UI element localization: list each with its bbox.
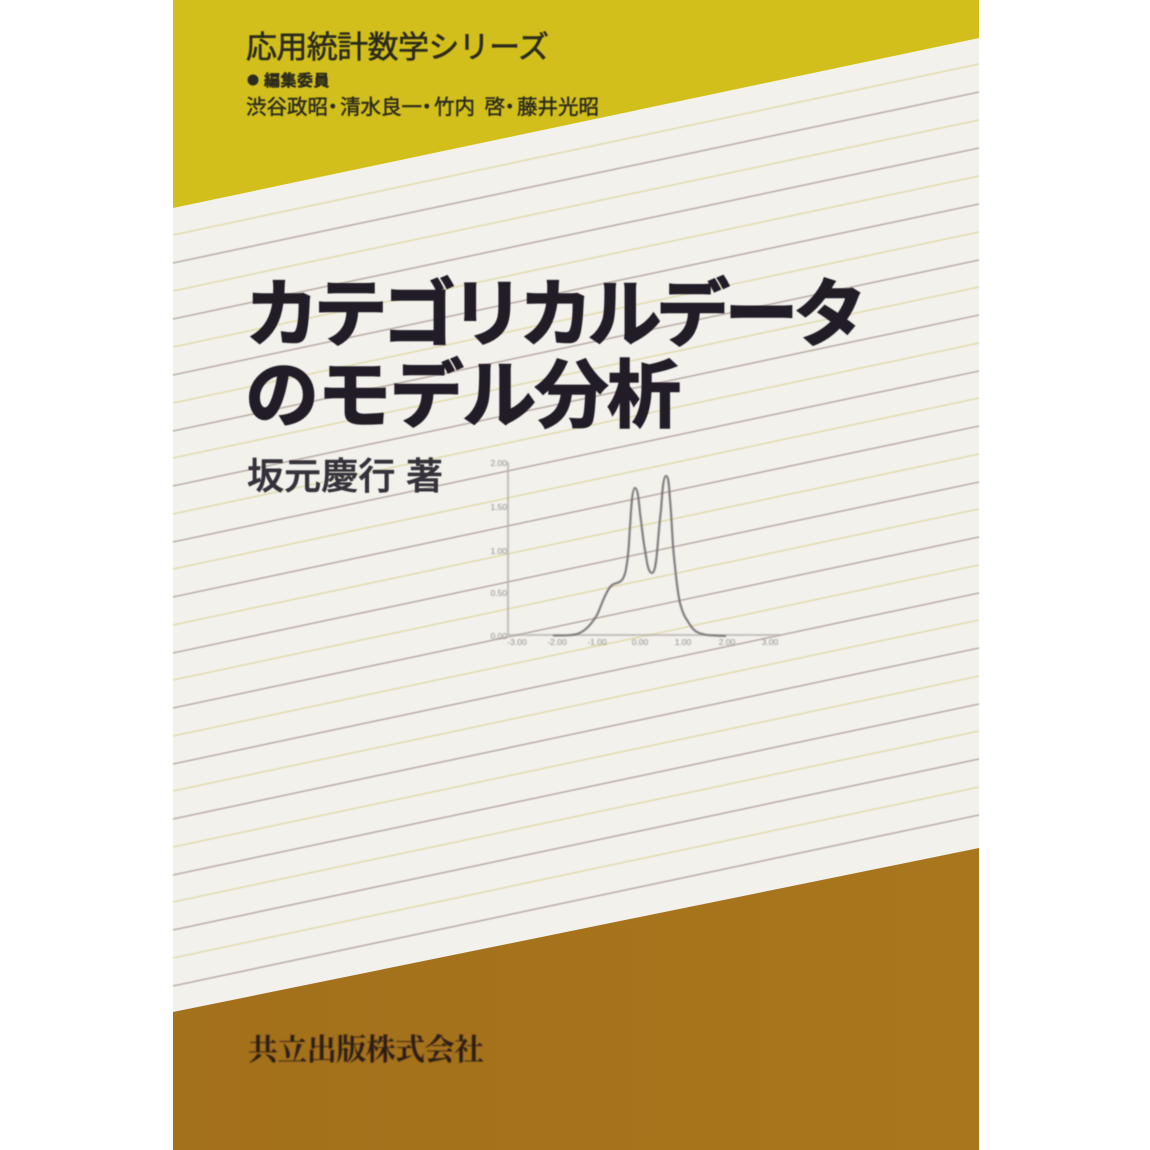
title line 2: のモデル分析 [245, 354, 681, 437]
y axis labels: 0.00 [490, 631, 507, 641]
brown bottom band [173, 848, 979, 1150]
y axis labels: 1.00 [490, 546, 507, 556]
editors names: 渋谷政昭・清水良一・竹内啓・藤井光昭 [246, 96, 599, 119]
density curve [553, 476, 726, 636]
x axis labels: 2.00 [719, 637, 736, 647]
x axis labels: 1.00 [675, 637, 692, 647]
yellow top band [173, 0, 979, 208]
x axis labels: -2.00 [547, 637, 567, 647]
title line 1: カテゴリカルデータ [245, 273, 867, 356]
x axis labels: -3.00 [507, 637, 527, 647]
y axis labels: 1.50 [490, 502, 507, 512]
chart axes [508, 462, 780, 635]
x axis labels: -1.00 [587, 637, 607, 647]
y axis labels: 2.00 [490, 458, 507, 468]
book cover [173, 0, 979, 1150]
author: 坂元慶行 著 [247, 456, 443, 497]
publisher name: 共立出版株式会社 [248, 1034, 484, 1067]
ruled diagonal lines [173, 64, 979, 986]
density chart [490, 458, 780, 647]
editors label: 編集委員 [264, 72, 330, 90]
series heading [246, 30, 599, 119]
x axis labels [507, 637, 779, 647]
x axis labels: 3.00 [762, 637, 779, 647]
y axis labels [490, 458, 507, 641]
series title: 応用統計数学シリーズ [246, 30, 549, 65]
y axis labels: 0.50 [490, 588, 507, 598]
x axis labels: 0.00 [632, 637, 649, 647]
book title [245, 273, 867, 437]
